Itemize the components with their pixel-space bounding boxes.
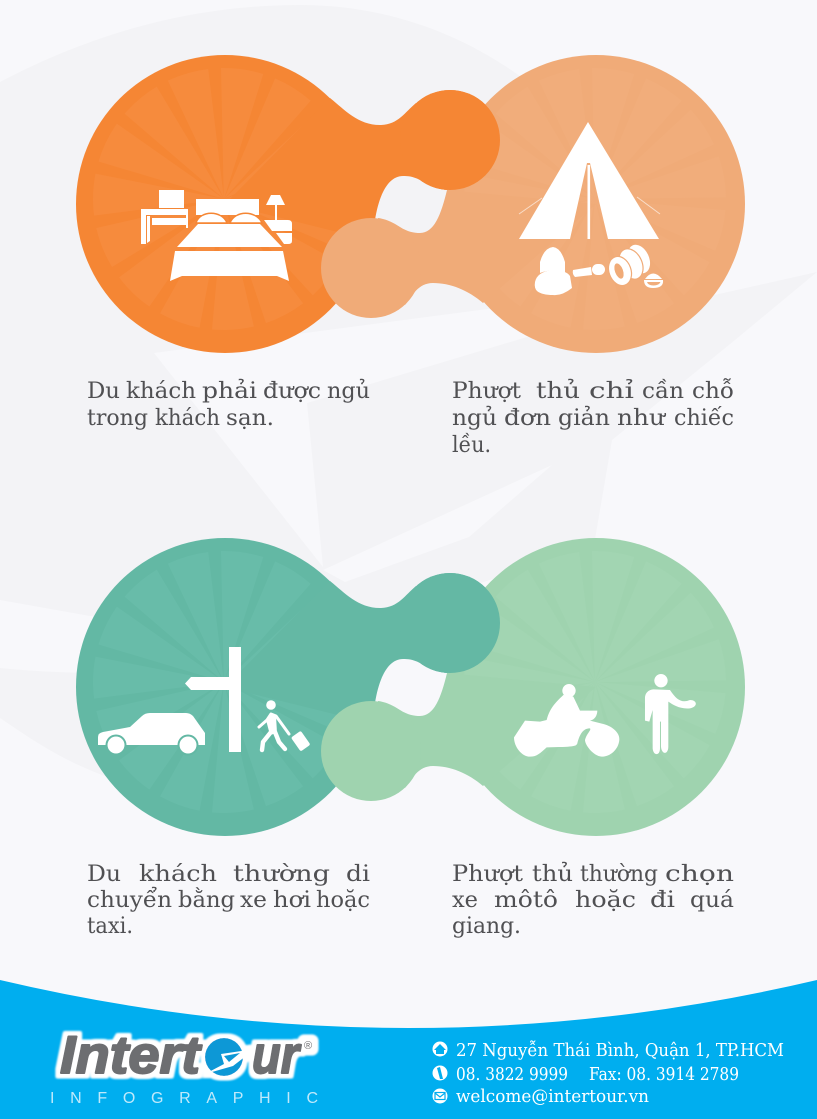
caption: backpacker rides motorbike or hitchhikes: chọn	[665, 862, 734, 887]
caption: tourist sleeps in hotel: khách	[155, 406, 220, 431]
address: 27 Nguyễn Thái Bình, Quận 1, TP.HCM	[456, 1039, 784, 1061]
left orange circle	[76, 55, 500, 353]
caption: backpacker rides motorbike or hitchhikes: Phượt	[452, 862, 523, 887]
caption: backpacker rides motorbike or hitchhikes: thường	[580, 862, 658, 887]
phone and fax	[456, 1064, 739, 1085]
caption: tourist travels by car: hoặc	[316, 888, 370, 913]
caption: backpacker sleeps in tent: chỗ	[692, 378, 734, 404]
icon: signpost	[185, 647, 241, 752]
caption: backpacker sleeps in tent: cần	[642, 378, 684, 404]
caption: tourist sleeps in hotel	[87, 378, 370, 431]
logo: InterTour: Intert	[60, 1026, 202, 1085]
icon: hitchhiker	[645, 674, 696, 754]
caption: backpacker sleeps in tent	[452, 378, 734, 458]
caption: backpacker sleeps in tent: chỉ	[589, 378, 634, 404]
caption: backpacker sleeps in tent: chiếc	[674, 405, 734, 431]
footer band	[0, 980, 817, 1119]
caption: backpacker rides motorbike or hitchhikes: môtô	[494, 888, 558, 913]
logo: InterTour: ®	[304, 1040, 312, 1052]
left teal circle	[76, 538, 500, 836]
caption: tourist sleeps in hotel: phải	[202, 378, 257, 404]
caption: tourist sleeps in hotel: sạn.	[226, 406, 274, 431]
panel: car vs motorbike graphic	[76, 538, 745, 939]
caption: backpacker sleeps in tent: thủ	[536, 378, 580, 404]
caption: backpacker rides motorbike or hitchhikes: xe	[452, 888, 478, 913]
caption: tourist travels by car: khách	[139, 862, 217, 887]
caption: backpacker sleeps in tent: như	[617, 406, 667, 431]
phone and fax: Fax: 08. 3914 2789	[589, 1064, 739, 1085]
logo subtitle: INFOGRAPHIC	[50, 1090, 318, 1107]
caption: backpacker rides motorbike or hitchhikes: hoặc	[575, 888, 636, 913]
phone and fax: 08. 3822 9999	[456, 1064, 568, 1085]
icon: car	[98, 713, 205, 756]
caption: tourist travels by car: bằng	[178, 887, 235, 913]
caption: backpacker rides motorbike or hitchhikes	[452, 861, 734, 939]
caption: backpacker sleeps in tent: ngủ	[452, 405, 497, 431]
right peach circle	[321, 55, 745, 353]
caption: backpacker rides motorbike or hitchhikes: thủ	[532, 861, 573, 887]
caption: backpacker rides motorbike or hitchhikes: giang.	[452, 914, 521, 939]
caption: tourist travels by car: hơi	[273, 888, 311, 913]
orange connector knob over peach	[400, 90, 500, 190]
icon: hotel bed and furniture	[141, 190, 292, 281]
icon: motorbike rider	[514, 684, 619, 757]
caption: tourist sleeps in hotel: được	[263, 379, 321, 404]
caption: tourist sleeps in hotel: ngủ	[327, 378, 370, 404]
caption: backpacker rides motorbike or hitchhikes: đi	[650, 888, 675, 913]
icon: tent and camping gear	[519, 122, 663, 295]
icon: phone	[432, 1066, 448, 1080]
caption: tourist travels by car: chuyển	[87, 885, 172, 913]
caption: tourist sleeps in hotel: Du	[87, 379, 120, 404]
teal connector knob over mint	[400, 573, 500, 673]
caption: backpacker sleeps in tent: lều.	[452, 432, 491, 458]
caption: tourist travels by car	[87, 862, 370, 939]
panel: hotel vs tent graphic	[76, 55, 745, 458]
icon: email	[432, 1088, 448, 1104]
caption: tourist travels by car: Du	[87, 862, 121, 887]
icon: address	[432, 1042, 448, 1056]
caption: tourist sleeps in hotel: trong	[87, 406, 148, 431]
caption: tourist sleeps in hotel: khách	[126, 379, 196, 404]
caption: tourist travels by car: di	[346, 862, 370, 887]
caption: tourist travels by car: thường	[233, 862, 330, 887]
logo: InterTour: ur	[252, 1026, 302, 1085]
right mint circle	[321, 538, 745, 836]
email: welcome@intertour.vn	[456, 1086, 649, 1107]
caption: backpacker rides motorbike or hitchhikes: quá	[690, 888, 734, 913]
caption: tourist travels by car: taxi.	[87, 914, 133, 939]
icon: traveller with suitcase	[259, 700, 310, 752]
caption: backpacker sleeps in tent: giản	[558, 405, 610, 431]
logo: InterTour	[60, 1026, 314, 1085]
caption: tourist travels by car: xe	[240, 888, 267, 913]
caption: backpacker sleeps in tent: Phượt	[452, 379, 521, 404]
caption: backpacker sleeps in tent: đơn	[504, 406, 551, 431]
